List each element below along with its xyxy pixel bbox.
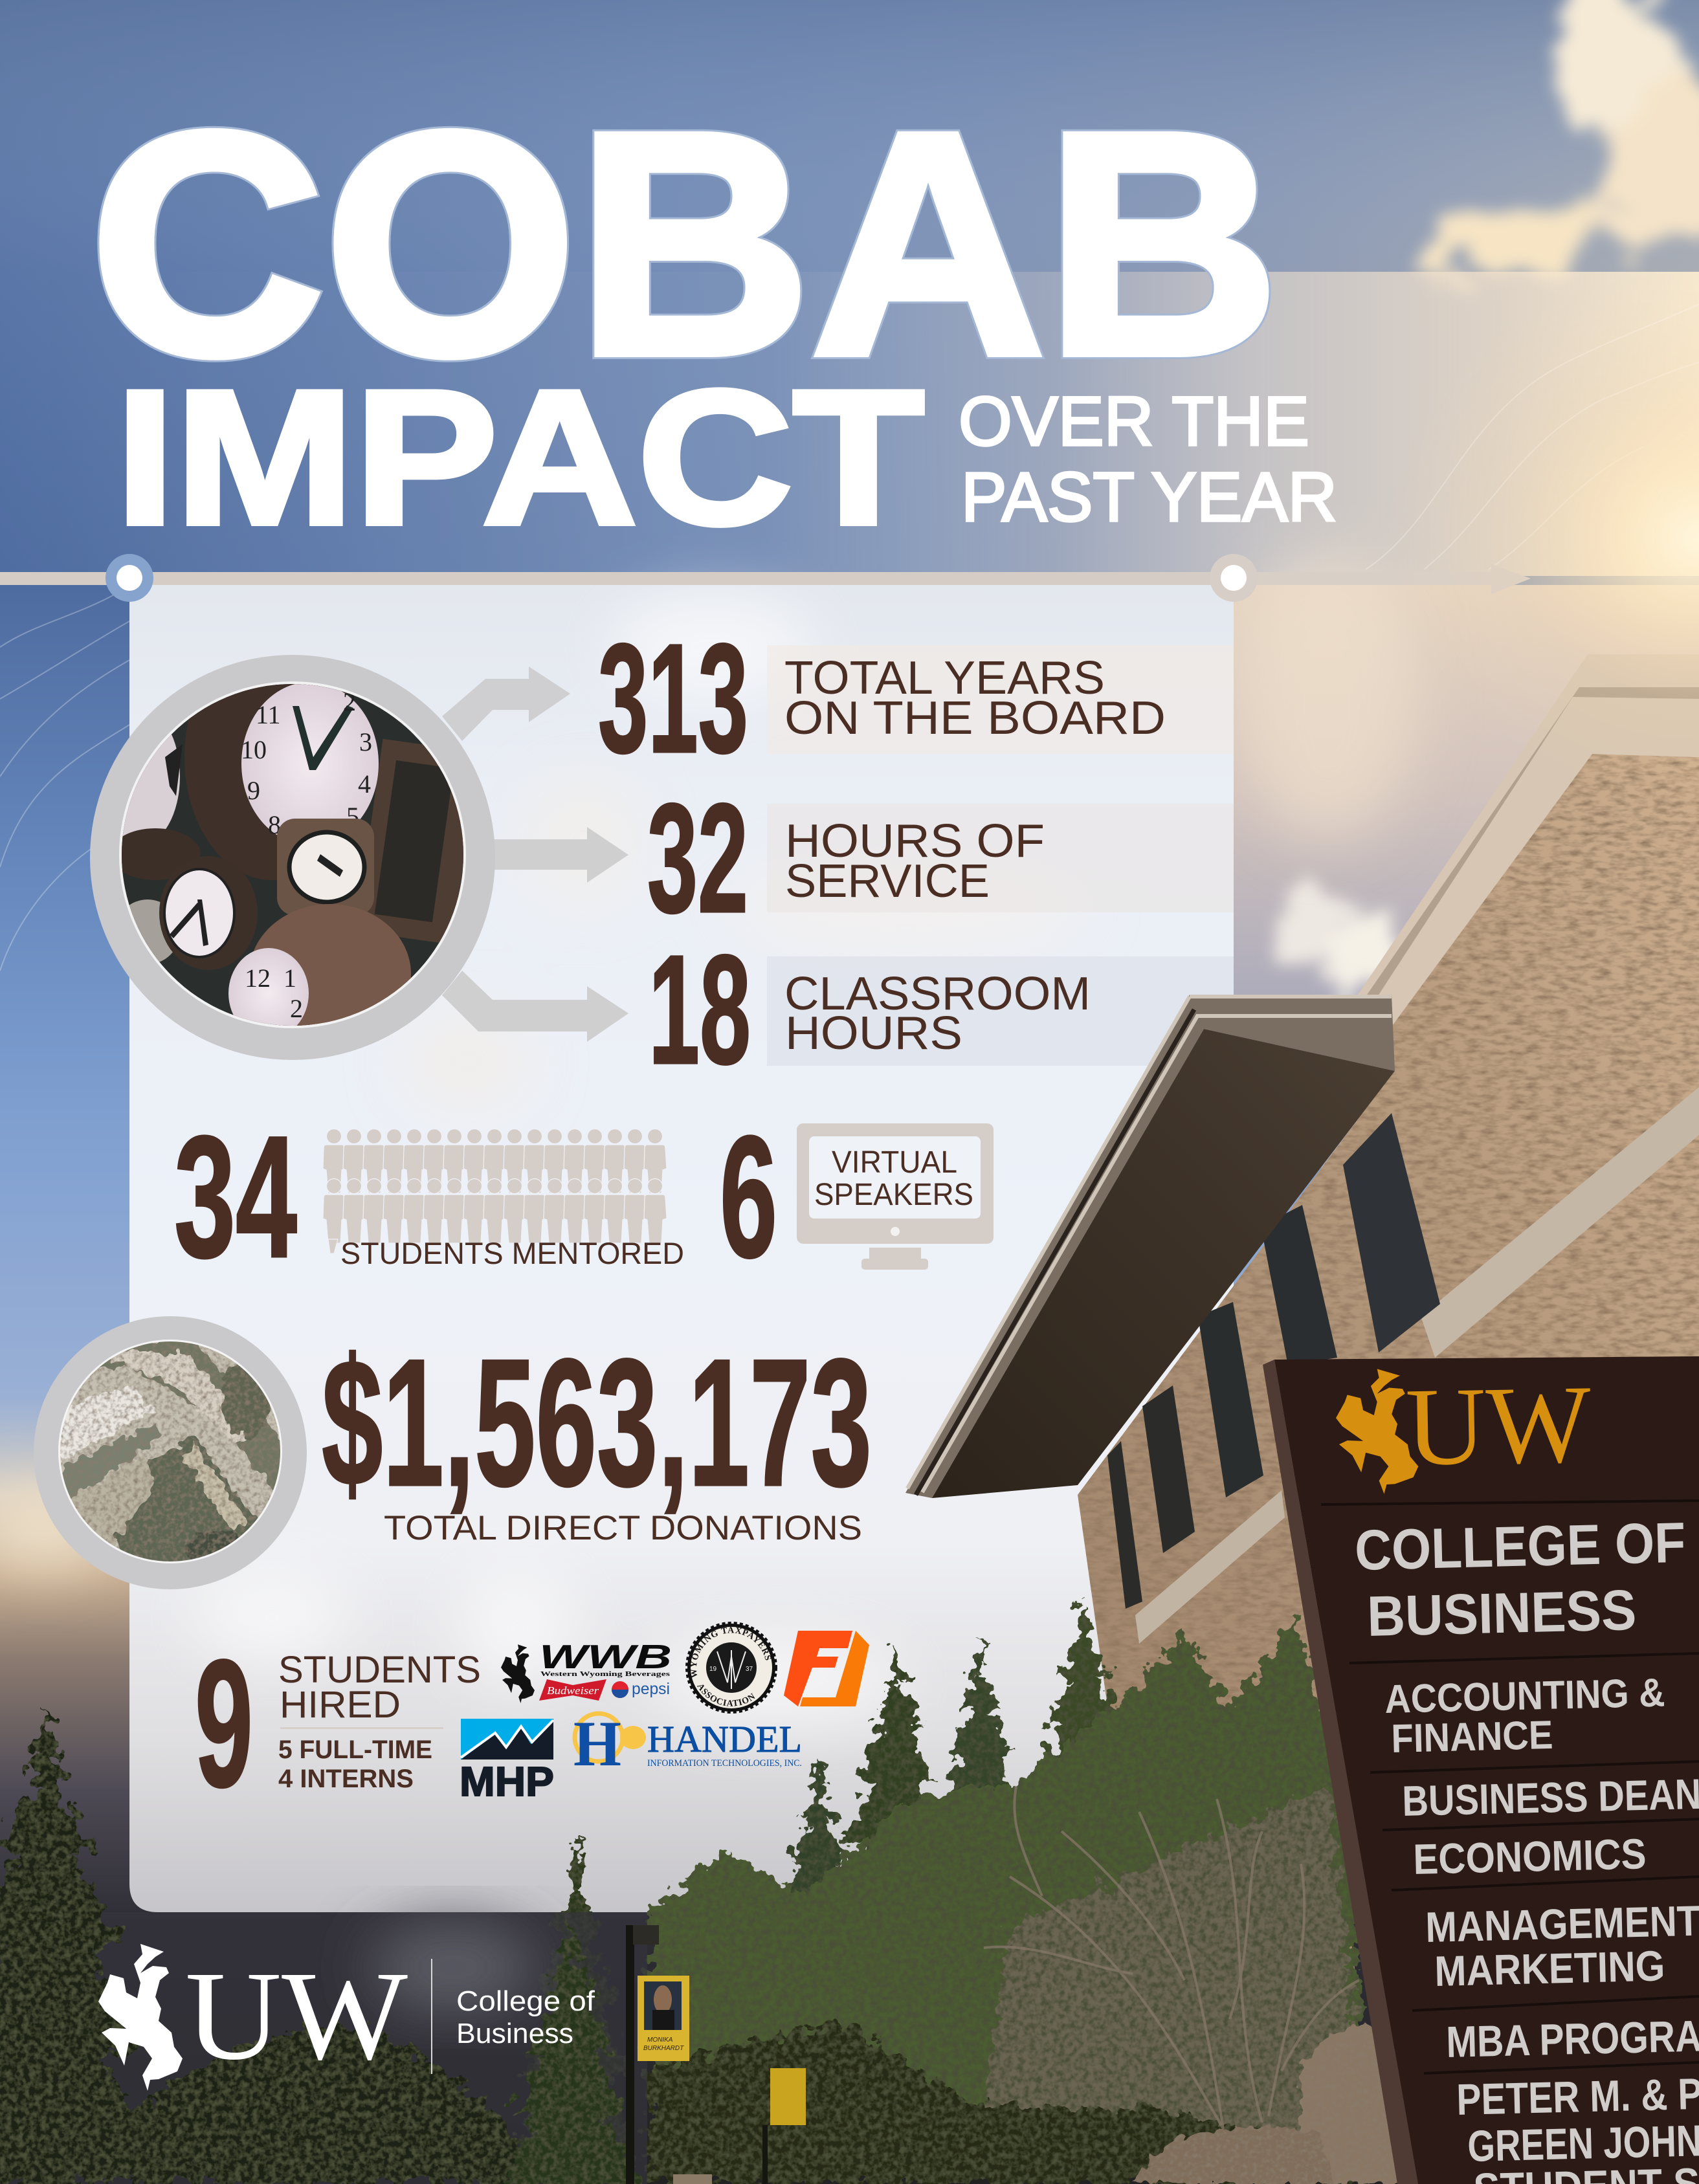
logo: orange F1 mark (784, 1631, 869, 1706)
photo: lamp post with banners: BURKHARDT (643, 2045, 684, 2052)
stat: 18 classroom hours: HOURS (785, 1008, 962, 1059)
logo: Wyoming Taxpayers Association seal: 19 (709, 1666, 717, 1673)
sign: College of Business directory: ACCOUNTING & (1384, 1670, 1665, 1722)
stat: 32 hours of service (647, 771, 1045, 945)
stat: 9 students hired (195, 1623, 481, 1825)
stat: 9 students hired: 5 FULL-TIME (278, 1736, 432, 1764)
sign: College of Business directory (1263, 1356, 1699, 2184)
logo: Wyoming Taxpayers Association seal: ASSOCIATION (697, 1685, 755, 1706)
stat: 313 total years on the board: ON THE BOARD (784, 692, 1166, 744)
stat: 18 classroom hours: 18 (649, 923, 751, 1096)
sign: College of Business directory: ECONOMICS (1413, 1829, 1647, 1883)
logo: Wyoming Taxpayers Association seal: WYOMING TAXPAYERS (691, 1627, 772, 1677)
logo: Western Wyoming Beverages (501, 1638, 672, 1703)
logo: Handel Information Technologies: H (573, 1708, 621, 1780)
logo: Western Wyoming Beverages: pepsi (632, 1680, 670, 1698)
photo: building roof overhang (905, 995, 1395, 1498)
footer: University of Wyoming College of Business logo: College of (456, 1985, 595, 2017)
icon: computer monitor: SPEAKERS (814, 1178, 973, 1212)
stat: 32 hours of service: 32 (647, 771, 748, 945)
title: IMPACT: IMPACT (115, 350, 924, 564)
logo: Wyoming Taxpayers Association seal: 37 (746, 1666, 753, 1673)
stat: 6 virtual speakers (720, 1099, 994, 1294)
sign: College of Business directory: UW (1405, 1363, 1592, 1489)
decorative contour lines (0, 304, 1699, 971)
subtitle: over the past year: PAST YEAR (961, 458, 1337, 536)
logo: Wyoming Taxpayers Association seal (687, 1624, 775, 1712)
stat: 18 classroom hours (649, 923, 1091, 1096)
stat strip backgrounds (767, 645, 1234, 1066)
icon: rows of student figures (323, 1129, 667, 1253)
icon: clocks photo circle: 12 (245, 964, 271, 993)
sign: College of Business directory: FINANCE (1391, 1713, 1553, 1761)
photo: lamp post with banners: MONIKA (647, 2036, 673, 2044)
logo: Western Wyoming Beverages: WWB (539, 1638, 672, 1676)
footer: University of Wyoming College of Business logo: UW (185, 1945, 408, 2086)
stat: total direct donations: $1,563,173 (322, 1322, 872, 1524)
stat: 32 hours of service: HOURS OF (785, 815, 1045, 867)
icon: clocks photo circle: 4 (358, 769, 371, 799)
logo: Handel Information Technologies (573, 1708, 802, 1780)
stat: total direct donations: TOTAL DIRECT DONATIONS (384, 1509, 862, 1547)
stat: 9 students hired: 9 (195, 1623, 253, 1825)
subtitle: over the past year: OVER THE (959, 382, 1309, 460)
photo: trees behind sign (511, 1598, 1372, 2184)
icon: money photo circle (34, 1316, 307, 1589)
logo: Western Wyoming Beverages: Western Wyoming Beverages (540, 1670, 671, 1678)
stat: 313 total years on the board: TOTAL YEARS (784, 652, 1105, 704)
photo: bare shrub (984, 1786, 1359, 2129)
stat: 34 students mentored: STUDENTS MENTORED (340, 1236, 684, 1270)
icon: clocks photo circle: 2 (343, 687, 356, 716)
footer: University of Wyoming College of Business logo: Business (456, 2018, 573, 2049)
logo: MHP (460, 1719, 554, 1805)
stat: 313 total years on the board (598, 612, 1166, 785)
arrows from clock circle (442, 667, 628, 1042)
stat: 32 hours of service: SERVICE (785, 855, 990, 907)
logo: Handel Information Technologies: HANDEL (647, 1718, 802, 1760)
panel: main translucent content panel (129, 585, 1234, 1912)
title: COBAB: COBAB (90, 66, 1280, 421)
icon: clocks photo circle: 8 (268, 810, 281, 839)
footer: University of Wyoming College of Business logo (98, 1944, 595, 2091)
stat: total direct donations (322, 1322, 872, 1547)
icon: clocks photo circle: 9 (247, 776, 260, 805)
icon: clocks photo circle (90, 634, 495, 1060)
stat: 6 virtual speakers: 6 (720, 1099, 777, 1294)
icon: computer monitor: VIRTUAL (832, 1145, 957, 1180)
stat: 34 students mentored: 34 (174, 1099, 298, 1294)
icon: clocks photo circle: 1 (283, 964, 296, 993)
icon: clocks photo circle: 3 (359, 727, 372, 756)
icon: clocks photo circle: 5 (346, 802, 359, 831)
horizontal timeline bar with arrow (0, 554, 1531, 602)
sign: College of Business directory: MARKETING (1434, 1941, 1665, 1995)
photo: lamp post with banners (626, 1925, 806, 2184)
icon: clocks photo circle: 2 (290, 994, 303, 1023)
logo: Western Wyoming Beverages: Budweiser (547, 1684, 599, 1697)
stat: 9 students hired: STUDENTS (278, 1649, 481, 1691)
stat: 9 students hired: HIRED (280, 1684, 401, 1726)
subtitle: over the past year (959, 382, 1337, 536)
photo: building wall and tower (1078, 654, 1699, 2006)
stat: 9 students hired: 4 INTERNS (278, 1765, 414, 1793)
photo: dark foreground and footer backdrop (0, 1708, 712, 2184)
stat: 313 total years on the board: 313 (598, 612, 748, 785)
sun glow (1388, 265, 1699, 809)
icon: clocks photo circle: 10 (241, 735, 267, 764)
photo: boulders (1133, 2024, 1421, 2184)
icon: computer monitor (797, 1123, 994, 1270)
sign: College of Business directory: BUSINESS (1366, 1578, 1637, 1648)
logo: Handel Information Technologies: INFORMATION TECHNOLOGIES, INC. (647, 1758, 802, 1769)
title: COBAB: COBAB (90, 66, 1280, 421)
stat: 34 students mentored (174, 1099, 684, 1294)
icon: clocks photo circle: 11 (256, 700, 281, 729)
translucent header band (0, 272, 1699, 576)
stat: 18 classroom hours: CLASSROOM (784, 968, 1091, 1020)
logo: MHP: MHP (460, 1758, 554, 1805)
